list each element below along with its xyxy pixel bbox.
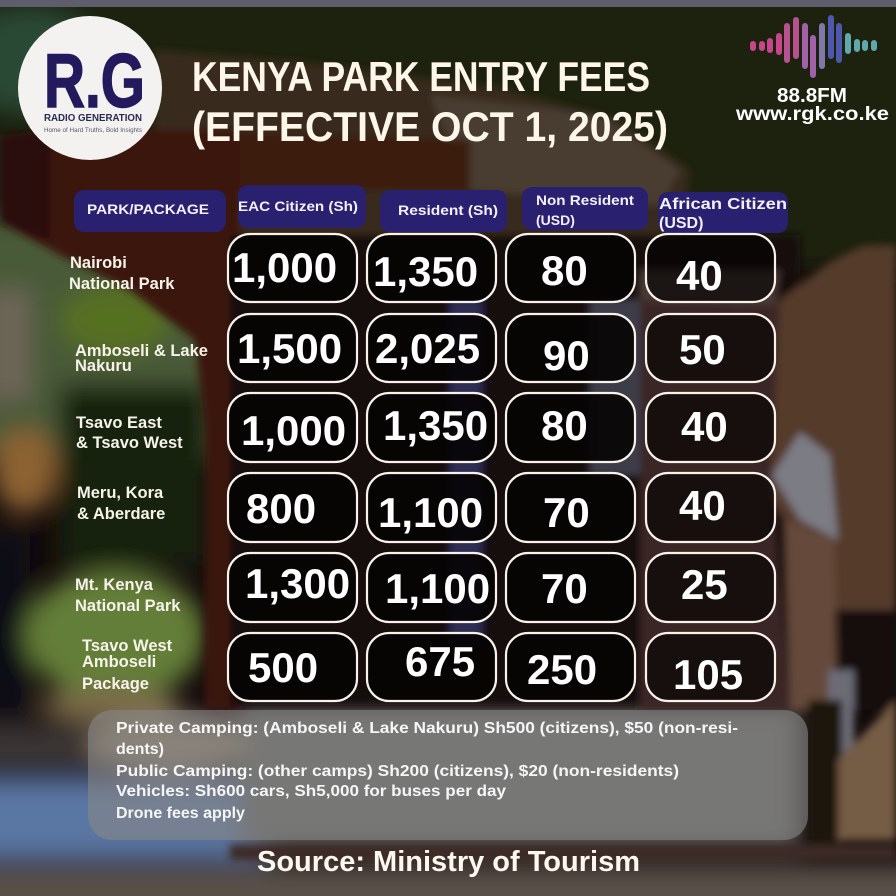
- centre body: [230, 235, 800, 705]
- station info: [735, 85, 889, 125]
- station info: www.rgk.co.ke: [735, 104, 889, 125]
- label: Nairobi National Park: Nairobi: [70, 254, 127, 272]
- notes panel: [88, 710, 808, 840]
- row: Nairobi National Park: [232, 244, 723, 299]
- row: Amboseli and Lake Nakuru: 90: [543, 332, 590, 379]
- row: Meru, Kora and Aberdare: 40: [679, 482, 726, 529]
- label: Tsavo West Amboseli Package: Amboseli: [82, 653, 156, 671]
- header: park/package: [74, 190, 226, 232]
- header: resident: Resident (Sh): [398, 202, 498, 218]
- header: EAC citizen: [238, 185, 366, 228]
- row: Tsavo East and West: 80: [541, 402, 588, 449]
- row: Tsavo West Amboseli Package: 500: [248, 644, 318, 691]
- fee cells: [228, 234, 775, 701]
- fee values: [232, 244, 743, 698]
- header: non resident: Non Resident: [536, 192, 634, 208]
- label: Meru, Kora and Aberdare: Meru, Kora: [77, 484, 164, 502]
- header: EAC citizen: EAC Citizen (Sh): [238, 198, 358, 214]
- label: Tsavo West Amboseli Package: Package: [82, 675, 149, 693]
- label: Meru, Kora and Aberdare: & Aberdare: [77, 505, 165, 523]
- head of centre elephant: [155, 50, 690, 240]
- label: Nairobi National Park: National Park: [69, 275, 175, 293]
- logo: Radio Generation: R.G: [44, 39, 145, 124]
- title: (EFFECTIVE OCT 1, 2025): [192, 103, 668, 150]
- row labels: [69, 254, 208, 693]
- row: Amboseli and Lake Nakuru: [237, 325, 726, 379]
- label: Amboseli and Lake Nakuru: Amboseli & Lake: [75, 342, 208, 360]
- row: Mt. Kenya National Park: 25: [681, 561, 728, 608]
- header: non resident: [522, 187, 648, 230]
- row: Tsavo West Amboseli Package: 675: [405, 638, 475, 685]
- row: Nairobi National Park: 80: [541, 247, 588, 294]
- row: Amboseli and Lake Nakuru: 2,025: [375, 325, 480, 372]
- row: Mt. Kenya National Park: 70: [541, 565, 588, 612]
- icon: radio waveform: [753, 18, 874, 75]
- left maroon flank: [0, 130, 240, 710]
- notes text: Public Camping: (other camps) Sh200 (citizens), $20 (non-residents): [116, 763, 679, 780]
- label: Mt. Kenya National Park: Mt. Kenya: [75, 576, 154, 594]
- row: Mt. Kenya National Park: [245, 560, 728, 612]
- logo: Radio Generation: Home of Hard Truths, Bold Insights: [44, 128, 142, 134]
- header: park/package: PARK/PACKAGE: [87, 201, 209, 217]
- header: African citizen: [658, 192, 788, 233]
- label: Amboseli and Lake Nakuru: Nakuru: [75, 357, 132, 375]
- label: Tsavo West Amboseli Package: Tsavo West: [82, 637, 173, 655]
- notes text: Drone fees apply: [116, 805, 245, 822]
- row: Mt. Kenya National Park: 1,300: [245, 560, 350, 607]
- row: Tsavo East and West: [241, 402, 728, 454]
- row: Meru, Kora and Aberdare: [246, 482, 726, 536]
- row: Nairobi National Park: 1,000: [232, 244, 337, 291]
- header: African citizen: African Citizen: [659, 196, 787, 213]
- label: Tsavo East and West: & Tsavo West: [76, 434, 183, 452]
- row: Mt. Kenya National Park: 1,100: [385, 565, 490, 612]
- row: Amboseli and Lake Nakuru: 1,500: [237, 325, 342, 372]
- row: Meru, Kora and Aberdare: 70: [543, 489, 590, 536]
- row: Nairobi National Park: 1,350: [373, 248, 478, 295]
- table header: [74, 185, 788, 233]
- title: [192, 53, 668, 150]
- row: Tsavo East and West: 40: [681, 403, 728, 450]
- row: Nairobi National Park: 40: [676, 252, 723, 299]
- right elephant: [770, 245, 896, 700]
- station info: 88.8FM: [777, 85, 847, 107]
- row: Tsavo West Amboseli Package: 105: [673, 651, 743, 698]
- notes text: Vehicles: Sh600 cars, Sh5,000 for buses per day: [116, 783, 506, 800]
- row: Tsavo West Amboseli Package: 250: [527, 646, 597, 693]
- header: non resident: (USD): [536, 212, 575, 228]
- label: Mt. Kenya National Park: National Park: [75, 597, 181, 615]
- row: Tsavo West Amboseli Package: [248, 638, 743, 698]
- logo: Radio Generation: RADIO GENERATION: [44, 113, 142, 124]
- row: Meru, Kora and Aberdare: 1,100: [378, 489, 483, 536]
- notes text: dents): [116, 741, 164, 758]
- row: Amboseli and Lake Nakuru: 50: [679, 326, 726, 373]
- source line: Source: Ministry of Tourism: [257, 846, 640, 878]
- label: Tsavo East and West: Tsavo East: [76, 414, 162, 432]
- title: KENYA PARK ENTRY FEES: [192, 53, 650, 100]
- logo: Radio Generation: [18, 16, 162, 160]
- header: resident: [380, 190, 507, 232]
- row: Tsavo East and West: 1,000: [241, 407, 346, 454]
- header: African citizen: (USD): [659, 215, 703, 232]
- notes text: Private Camping: (Amboseli & Lake Nakuru) Sh500 (citizens), $50 (non-resi-: [116, 720, 738, 737]
- notes text: [116, 720, 738, 822]
- row: Tsavo East and West: 1,350: [383, 402, 488, 449]
- row: Meru, Kora and Aberdare: 800: [246, 485, 316, 532]
